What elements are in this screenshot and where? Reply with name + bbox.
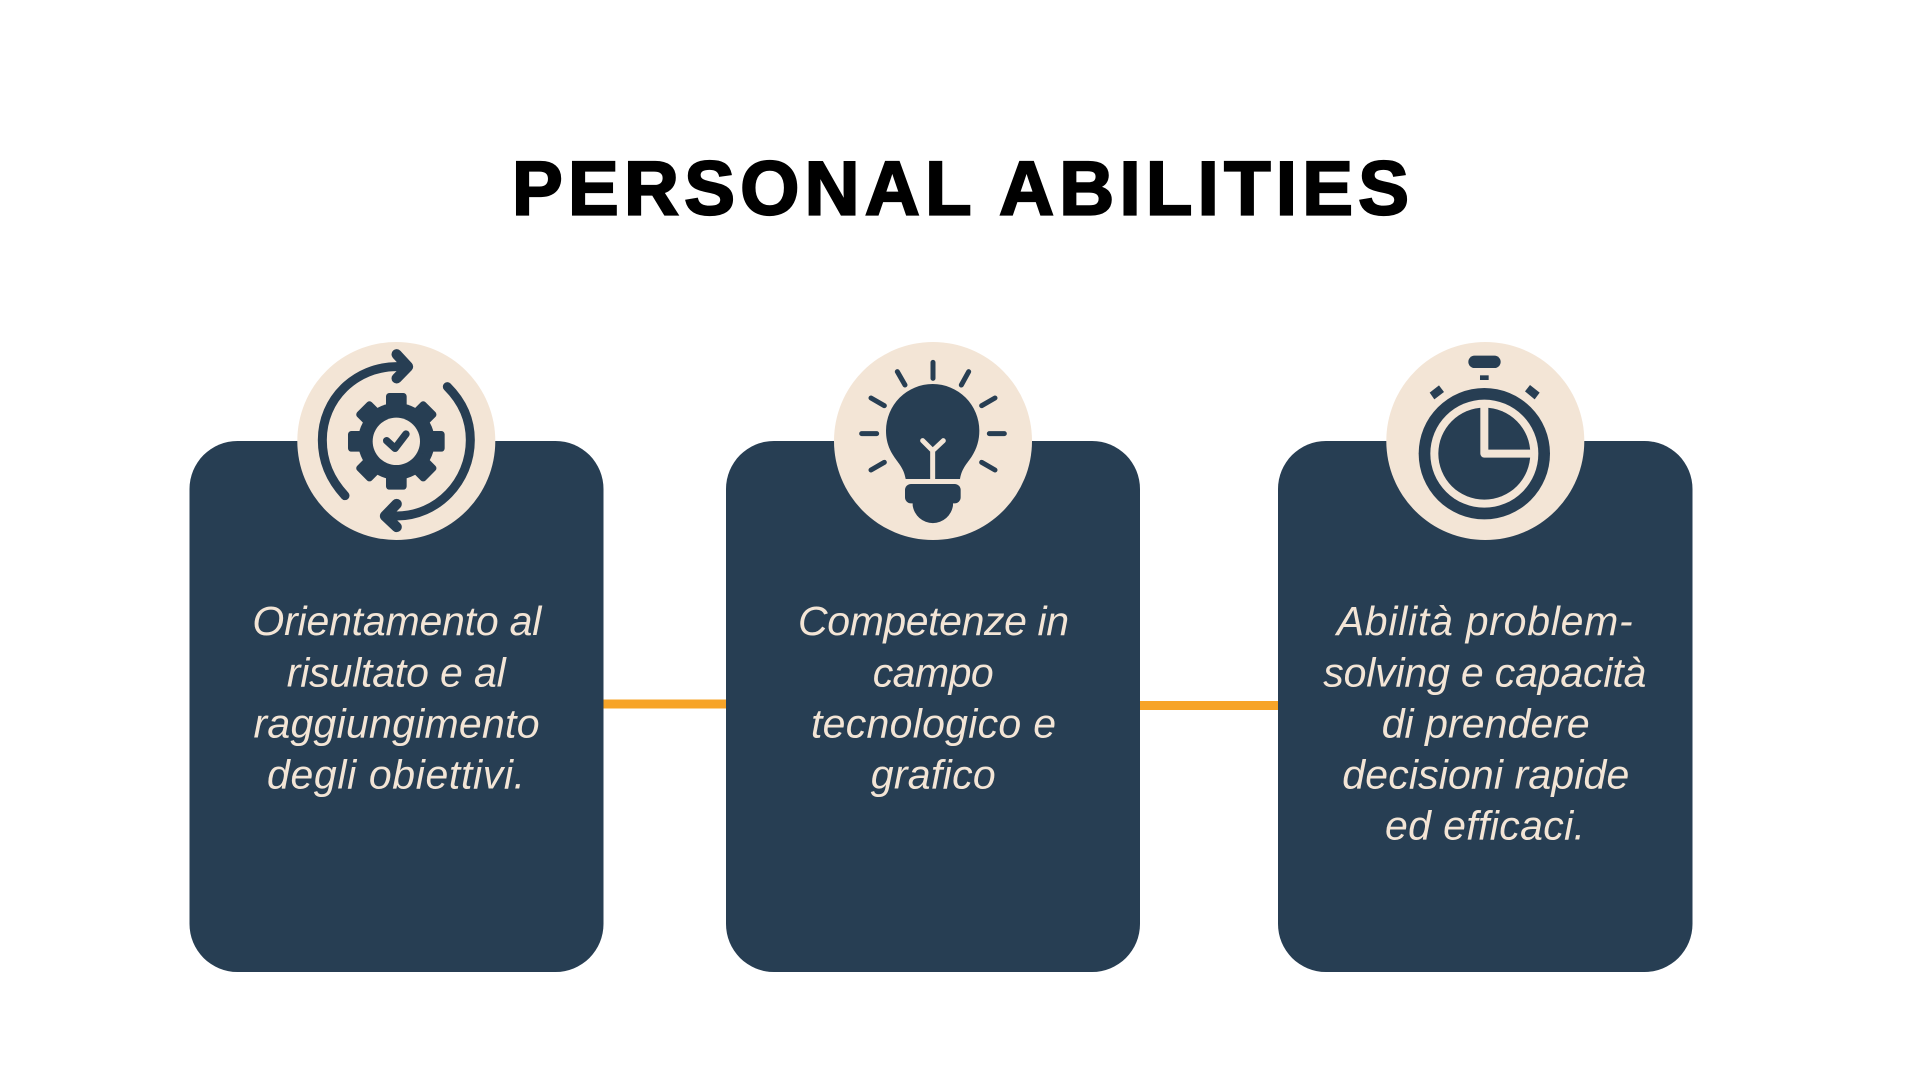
connector: card 2 to card 3	[1136, 701, 1282, 710]
text: problem solving: di prendere	[1382, 700, 1590, 746]
title: PERSONAL ABILITIES	[512, 146, 1409, 232]
text: results orientation: raggiungimento	[254, 700, 540, 746]
text: problem solving: ed efficaci.	[1385, 802, 1585, 848]
text: problem solving: solving e capacità	[1323, 650, 1646, 696]
text: technology skills: campo	[873, 650, 994, 696]
connector: card 1 to card 2	[600, 700, 730, 708]
icon: light bulb	[834, 342, 1032, 540]
text: results orientation	[252, 598, 543, 798]
text: problem solving: Abilità problem-	[1334, 598, 1633, 644]
text: technology skills: Competenze in	[798, 598, 1069, 644]
panel: problem solving	[1278, 342, 1692, 972]
text: results orientation: degli obiettivi.	[267, 752, 525, 798]
panel: technology skills	[726, 342, 1140, 972]
text: results orientation: Orientamento al	[252, 598, 543, 644]
text: technology skills	[798, 598, 1069, 798]
text: technology skills: tecnologico e	[811, 700, 1056, 746]
text: problem solving	[1323, 598, 1646, 848]
icon: stopwatch	[1386, 342, 1584, 540]
text: problem solving: decisioni rapide	[1342, 752, 1629, 798]
text: results orientation: risultato e al	[287, 650, 508, 696]
panel: results orientation	[190, 342, 604, 972]
text: technology skills: grafico	[871, 752, 996, 798]
icon: gear with cycle arrows	[297, 342, 495, 540]
